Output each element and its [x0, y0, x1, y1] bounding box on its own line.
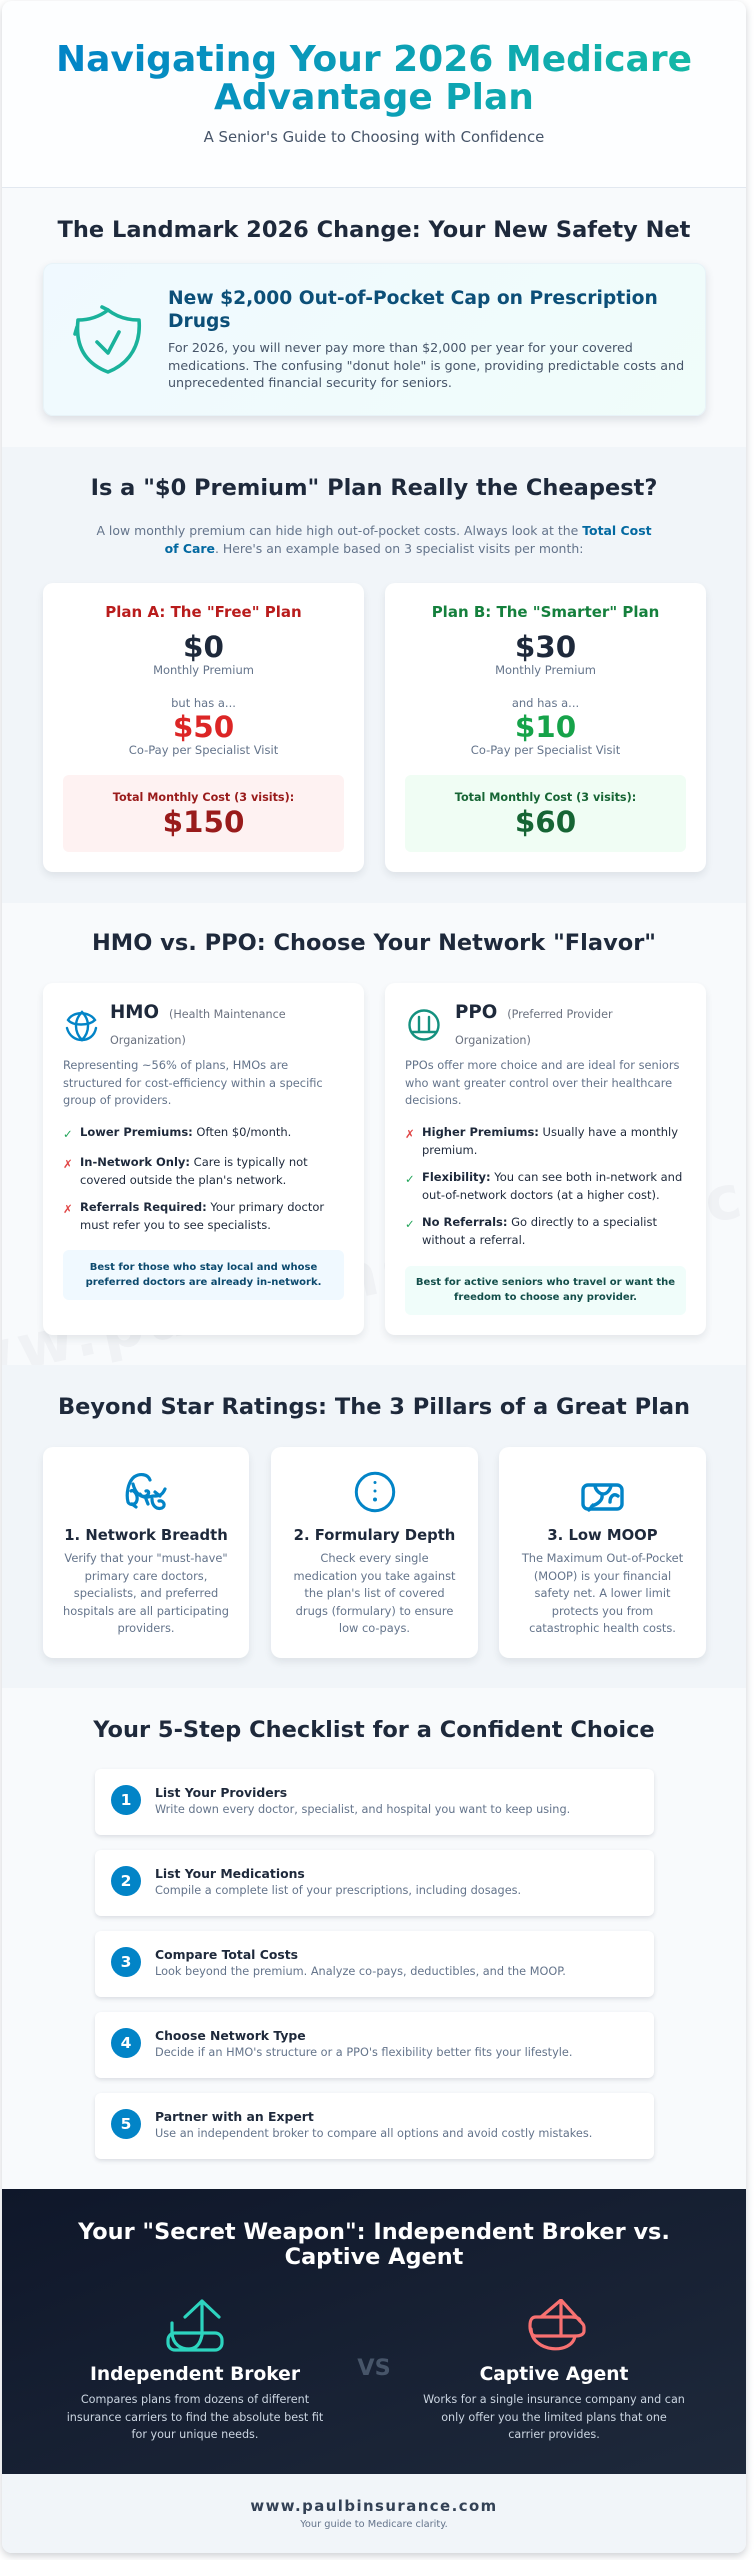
title — [56, 39, 692, 118]
icon: captive agent — [528, 2299, 586, 2350]
intro text: of Care. Here's an example based on 3 specialist visits per month: — [165, 540, 583, 556]
connector text: and has a... — [512, 696, 579, 710]
total value: $60 — [515, 805, 576, 839]
list item: higher premiums: Higher Premiums: Usually have a monthly — [422, 1125, 678, 1139]
callout card — [43, 263, 706, 416]
step 2 text: Compile a complete list of your prescriptions, including dosages. — [155, 1884, 521, 1897]
PPO description: PPOs offer more choice and are ideal for seniors — [405, 1058, 679, 1072]
icon: PPO circle — [408, 1009, 440, 1041]
pillar 1 text: Verify that your "must-have" — [64, 1551, 228, 1565]
mark: ✓ — [405, 1172, 415, 1186]
title: Navigating Your 2026 Medicare — [56, 39, 692, 80]
heading: Captive Agent — [285, 2244, 463, 2270]
plan A title: Plan A: The "Free" Plan — [105, 603, 302, 621]
best-for text: Best for active seniors who travel or want the — [416, 1277, 675, 1288]
panel: formulary depth — [271, 1447, 478, 1658]
pillar 2 text: medication you take against — [294, 1568, 455, 1582]
heading: The Landmark 2026 Change: Your New Safety Net — [58, 217, 690, 243]
step 4 title: Choose Network Type — [155, 2028, 306, 2043]
pillar 3 title: 3. Low MOOP — [547, 1527, 658, 1544]
section: checklist — [2, 1688, 746, 2189]
step 5 title: Partner with an Expert — [155, 2109, 314, 2124]
list item: no referrals: without a referral. — [422, 1233, 525, 1247]
heading: Your 5-Step Checklist for a Confident Choice — [93, 1717, 655, 1743]
section: broker vs captive agent — [2, 2189, 746, 2474]
PPO heading: PPO (Preferred Provider — [455, 1002, 613, 1023]
HMO description: structured for cost-efficiency within a specific — [63, 1076, 323, 1090]
list item: flexibility: Flexibility: You can see both in-network and — [422, 1170, 682, 1184]
pillar 1 title: 1. Network Breadth — [64, 1527, 228, 1544]
plan B copay: $10 — [515, 710, 576, 744]
best-for text: freedom to choose any provider. — [454, 1292, 637, 1303]
step 2 — [95, 1850, 654, 1916]
number 1: 1 — [121, 1791, 131, 1809]
PPO heading — [455, 1002, 613, 1047]
icon: independent broker — [166, 2299, 224, 2352]
website: www.paulbinsurance.com — [250, 2497, 498, 2515]
mark: ✗ — [63, 1157, 73, 1171]
icon: shield check — [73, 305, 142, 374]
list item: flexibility — [422, 1170, 682, 1202]
HMO heading — [110, 1002, 286, 1047]
captive agent text: Works for a single insurance company and can — [423, 2393, 685, 2406]
heading — [78, 2218, 670, 2270]
heading: Is a "$0 Premium" Plan Really the Cheapest? — [91, 475, 657, 501]
copay label: Co-Pay per Specialist Visit — [471, 743, 620, 757]
best-for text — [416, 1277, 675, 1303]
pillar 3 text: protects you from — [552, 1604, 653, 1618]
panel: PPO — [385, 983, 706, 1335]
HMO description — [63, 1058, 323, 1107]
section: premium comparison — [2, 447, 746, 903]
premium label: Monthly Premium — [495, 663, 596, 677]
step 3 text: Look beyond the premium. Analyze co-pays, deductibles, and the MOOP. — [155, 1965, 566, 1978]
best-for text: Best for those who stay local and whose — [90, 1262, 317, 1273]
captive agent text: only offer you the limited plans that one — [441, 2410, 667, 2424]
pillar 1 text: hospitals are all participating — [63, 1604, 229, 1618]
number 2 — [111, 1866, 141, 1896]
step 5 — [95, 2093, 654, 2159]
callout text: unprecedented financial security for seniors. — [168, 375, 452, 390]
icon: MOOP — [581, 1483, 624, 1512]
step 4 — [95, 2012, 654, 2078]
title: Advantage Plan — [214, 77, 534, 118]
pillar 3 text: catastrophic health costs. — [529, 1621, 676, 1635]
pillar 3 text: (MOOP) is your financial — [534, 1568, 671, 1582]
pillar 1 text: primary care doctors, — [85, 1568, 207, 1582]
step 1 — [95, 1769, 654, 1835]
pillar 3 text — [522, 1551, 683, 1635]
step 1 text: Write down every doctor, specialist, and hospital you want to keep using. — [155, 1803, 570, 1816]
callout text: medications. The confusing "donut hole" is gone, providing predictable costs and — [168, 358, 684, 372]
independent broker title: Independent Broker — [90, 2364, 300, 2385]
best-for text — [86, 1262, 321, 1288]
number 3 — [111, 1947, 141, 1977]
step 3 title: Compare Total Costs — [155, 1947, 298, 1962]
HMO heading: Organization) — [110, 1034, 186, 1047]
mark: ✗ — [63, 1202, 73, 1216]
independent broker text: for your unique needs. — [132, 2428, 258, 2441]
list item: flexibility: out-of-network doctors (at a higher cost). — [422, 1188, 660, 1202]
best-for box — [63, 1250, 344, 1300]
total value: $150 — [163, 805, 244, 839]
intro text — [96, 523, 652, 556]
footer — [2, 2474, 746, 2553]
section: three pillars — [2, 1365, 746, 1688]
HMO description: group of providers. — [63, 1093, 171, 1107]
pillar 1 text — [63, 1551, 229, 1635]
PPO heading: Organization) — [455, 1034, 531, 1047]
list item: in-network only: covered outside the plan's network. — [80, 1173, 286, 1187]
callout text: For 2026, you will never pay more than $2,000 per year for your covered — [168, 340, 633, 355]
mark: ✓ — [63, 1127, 73, 1141]
pillar 2 text: Check every single — [320, 1551, 429, 1565]
VS label: VS — [357, 2355, 391, 2381]
step 1 title: List Your Providers — [155, 1785, 287, 1800]
independent broker text — [67, 2393, 323, 2441]
callout text — [168, 340, 684, 390]
total label: Total Monthly Cost (3 visits): — [113, 791, 294, 804]
independent broker text: insurance carriers to find the absolute best fit — [67, 2410, 323, 2424]
step 3 — [95, 1931, 654, 1997]
section: HMO vs PPO — [2, 903, 746, 1365]
best-for box — [405, 1266, 686, 1315]
tagline: Your guide to Medicare clarity. — [300, 2519, 448, 2530]
heading: Your "Secret Weapon": Independent Broker vs. — [78, 2218, 670, 2244]
PPO description — [405, 1058, 679, 1107]
panel: plan A — [43, 583, 364, 872]
PPO description: who want greater control over their healthcare — [405, 1076, 672, 1090]
number 5: 5 — [121, 2115, 131, 2133]
independent broker text: Compares plans from dozens of different — [81, 2393, 309, 2406]
number 1 — [111, 1785, 141, 1815]
heading: Beyond Star Ratings: The 3 Pillars of a Great Plan — [58, 1394, 690, 1420]
plan A premium: $0 — [183, 630, 224, 664]
panel: HMO — [43, 983, 364, 1335]
list item: higher premiums — [422, 1125, 678, 1157]
number 5 — [111, 2109, 141, 2139]
PPO description: decisions. — [405, 1093, 462, 1107]
icon: network — [126, 1473, 167, 1510]
icon: HMO globe — [66, 1010, 98, 1042]
copay label: Co-Pay per Specialist Visit — [129, 743, 278, 757]
step 4 text: Decide if an HMO's structure or a PPO's flexibility better fits your lifestyle. — [155, 2046, 572, 2059]
section: landmark change — [2, 188, 746, 447]
pillar 2 text: low co-pays. — [339, 1621, 410, 1635]
subtitle: A Senior's Guide to Choosing with Confidence — [204, 128, 544, 146]
pillar 2 text — [294, 1551, 456, 1635]
intro text: A low monthly premium can hide high out-of-pocket costs. Always look at the Total Cost — [96, 523, 652, 538]
step 2 title: List Your Medications — [155, 1866, 305, 1881]
mark: ✗ — [405, 1127, 415, 1141]
pillar 2 text: drugs (formulary) to ensure — [296, 1604, 453, 1618]
number 4 — [111, 2028, 141, 2058]
HMO description: Representing ~56% of plans, HMOs are — [63, 1058, 288, 1072]
list item: in-network only — [80, 1155, 308, 1187]
step 5 text: Use an independent broker to compare all options and avoid costly mistakes. — [155, 2127, 592, 2140]
plan B title: Plan B: The "Smarter" Plan — [432, 603, 659, 621]
list item: no referrals — [422, 1215, 657, 1247]
number 4: 4 — [121, 2034, 131, 2052]
pillar 2 text: the plan's list of covered — [304, 1586, 445, 1600]
captive agent title: Captive Agent — [480, 2364, 628, 2385]
captive agent text: carrier provides. — [508, 2428, 600, 2441]
number 2: 2 — [121, 1872, 131, 1890]
list item: in-network only: In-Network Only: Care is typically not — [80, 1155, 308, 1169]
total label: Total Monthly Cost (3 visits): — [455, 791, 636, 804]
pillar 1 text: providers. — [117, 1621, 174, 1635]
list item: lower premiums: Lower Premiums: Often $0/month. — [80, 1125, 291, 1139]
list item: referrals required: Referrals Required: Your primary doctor — [80, 1200, 324, 1214]
list item: no referrals: No Referrals: Go directly to a specialist — [422, 1215, 657, 1229]
header — [2, 1, 746, 188]
HMO heading: HMO (Health Maintenance — [110, 1002, 286, 1023]
icon: formulary — [354, 1472, 396, 1512]
pillar 1 text: specialists, and preferred — [74, 1586, 218, 1600]
premium label: Monthly Premium — [153, 663, 254, 677]
captive agent text — [423, 2393, 685, 2441]
plan B total box — [405, 775, 686, 852]
best-for text: preferred doctors are already in-network. — [86, 1277, 321, 1288]
list item: higher premiums: premium. — [422, 1143, 477, 1157]
callout title — [168, 288, 658, 332]
connector text: but has a... — [171, 696, 236, 710]
list item: referrals required — [80, 1200, 324, 1232]
plan A copay: $50 — [173, 710, 234, 744]
callout title: New $2,000 Out-of-Pocket Cap on Prescription — [168, 288, 658, 309]
pillar 2 title: 2. Formulary Depth — [294, 1527, 455, 1544]
plan B premium: $30 — [515, 630, 576, 664]
pillar 3 text: The Maximum Out-of-Pocket — [522, 1551, 683, 1565]
number 3: 3 — [121, 1953, 131, 1971]
mark: ✓ — [405, 1217, 415, 1231]
plan A total box — [63, 775, 344, 852]
list item: referrals required: must refer you to see specialists. — [80, 1218, 271, 1232]
heading: HMO vs. PPO: Choose Your Network "Flavor" — [92, 930, 656, 956]
panel: low MOOP — [499, 1447, 706, 1658]
panel: network breadth — [43, 1447, 249, 1658]
pillar 3 text: safety net. A lower limit — [535, 1586, 670, 1600]
callout title: Drugs — [168, 311, 231, 332]
panel: plan B — [385, 583, 706, 872]
